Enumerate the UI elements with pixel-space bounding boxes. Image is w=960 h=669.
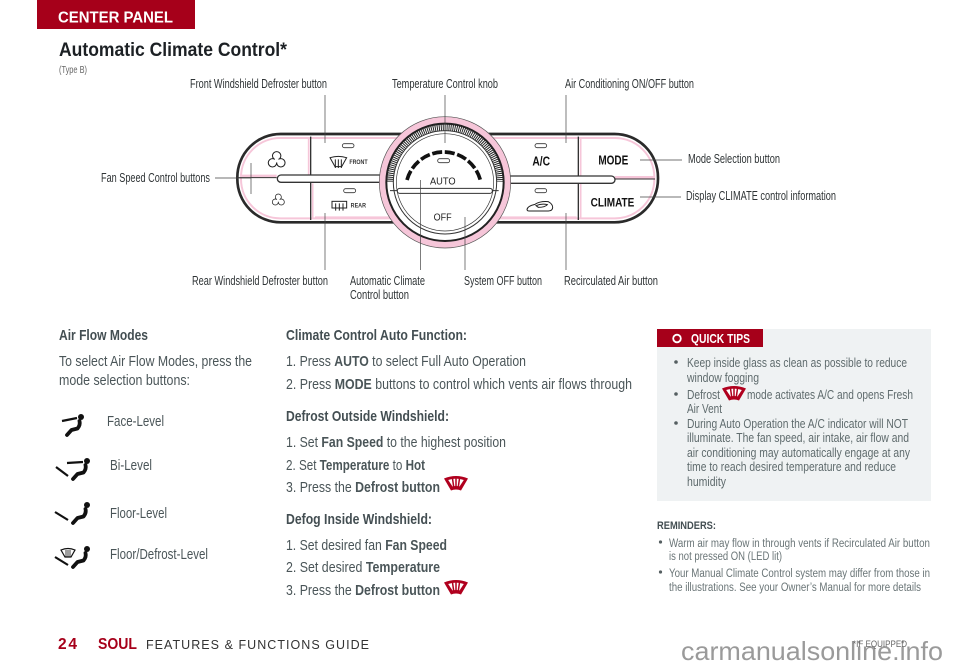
label: front windshield defroster bbox=[190, 77, 327, 143]
icon: fan speed low bbox=[272, 194, 284, 205]
label: air conditioning button bbox=[565, 77, 694, 143]
defog inside windshield: 3. Press the Defrost button bbox=[286, 582, 440, 599]
reminder: recirculated air bbox=[659, 538, 930, 563]
air flow modes section bbox=[55, 327, 252, 567]
header tab: center panel bbox=[37, 0, 195, 29]
defog inside windshield bbox=[286, 511, 468, 599]
tip: defrost mode bbox=[674, 386, 913, 416]
reminders heading: REMINDERS: bbox=[657, 520, 716, 532]
label: mode selection button: Mode Selection button bbox=[688, 152, 780, 166]
defog inside windshield: Defog Inside Windshield: bbox=[286, 511, 432, 528]
reminder: manual climate control: the illustrations. See your Owner’s Manual for more details bbox=[669, 582, 921, 594]
defrost outside windshield bbox=[286, 408, 506, 496]
footer bbox=[58, 636, 943, 666]
instruction text bbox=[59, 353, 252, 389]
button: mode: MODE bbox=[598, 152, 629, 167]
label: recirculated air button bbox=[564, 213, 658, 288]
button: climate: CLIMATE bbox=[591, 196, 634, 210]
auto function: Climate Control Auto Function: bbox=[286, 327, 467, 344]
mode: bi-level: Bi-Level bbox=[110, 457, 152, 474]
button: rear defroster: REAR bbox=[351, 203, 366, 210]
instruction text: mode selection buttons: bbox=[59, 372, 190, 389]
tip: clean glass: window fogging bbox=[686, 371, 759, 385]
auto function bbox=[286, 327, 632, 393]
label: air conditioning button: Air Conditioning ON/OFF button bbox=[565, 77, 694, 91]
mode: floor-level: Floor-Level bbox=[110, 505, 167, 522]
page number: 24 bbox=[58, 636, 77, 653]
tip: auto operation: illuminate. The fan speed, air intake, air flow and bbox=[687, 431, 909, 445]
label: rear windshield defroster bbox=[192, 213, 328, 288]
quick tips tab: QUICK TIPS bbox=[691, 331, 750, 346]
label: fan speed control buttons bbox=[101, 163, 251, 194]
tip: clean glass bbox=[674, 356, 907, 385]
label: front windshield defroster: Front Windshield Defroster button bbox=[190, 77, 327, 91]
auto function: 2. Press MODE buttons to control which vents air flows through bbox=[286, 376, 632, 393]
indicator lights bbox=[342, 144, 547, 193]
defog inside windshield: 1. Set desired fan Fan Speed bbox=[286, 537, 447, 554]
tip: auto operation: time to reach desired temperature and reduce bbox=[687, 460, 896, 474]
mode: face-level bbox=[62, 413, 164, 435]
button: A/C: A/C bbox=[532, 155, 550, 169]
temperature knob: AUTO bbox=[430, 177, 456, 188]
mode: floor-level bbox=[55, 502, 167, 523]
heading: air flow modes: Air Flow Modes bbox=[59, 327, 148, 344]
if equipped note: *IF EQUIPPED bbox=[853, 639, 907, 650]
temperature knob: OFF bbox=[434, 212, 452, 223]
temperature knob bbox=[379, 117, 511, 248]
tip: clean glass: Keep inside glass as clean as possible to reduce bbox=[687, 356, 907, 370]
button: front defroster bbox=[330, 156, 368, 168]
climate control instructions bbox=[286, 327, 632, 599]
button: front defroster: FRONT bbox=[349, 159, 368, 166]
mode: floor/defrost-level bbox=[55, 546, 208, 567]
panel: quick tips bbox=[657, 329, 931, 501]
label: recirculated air button: Recirculated Air button bbox=[564, 274, 658, 288]
climate control panel diagram bbox=[237, 117, 658, 248]
tip: auto operation: air conditioning may automatically engage at any bbox=[687, 446, 911, 460]
watermark: carmanualsonline.info bbox=[681, 636, 943, 666]
label: rear windshield defroster: Rear Windshield Defroster button bbox=[192, 274, 328, 288]
tip: auto operation: During Auto Operation the A/C indicator will NOT bbox=[687, 417, 908, 431]
tip: defrost mode: mode activates A/C and opens Fresh bbox=[747, 388, 913, 402]
label: temperature control knob bbox=[392, 77, 498, 143]
icon: recirculated air car bbox=[527, 202, 553, 211]
label: system off button: System OFF button bbox=[464, 274, 542, 288]
label: automatic climate control button: Automatic Climate bbox=[350, 274, 425, 288]
header tab: center panel: CENTER PANEL bbox=[58, 10, 173, 26]
model name: SOUL bbox=[98, 636, 137, 653]
label: system off button bbox=[464, 217, 542, 288]
label: fan speed control buttons: Fan Speed Control buttons bbox=[101, 171, 210, 185]
reminder: manual climate control bbox=[659, 568, 930, 594]
title: Automatic Climate Control* bbox=[59, 40, 288, 61]
panel body bbox=[237, 134, 658, 222]
guide title: FEATURES & FUNCTIONS GUIDE bbox=[146, 638, 369, 652]
reminder: recirculated air: is not pressed ON (LED lit) bbox=[669, 551, 782, 563]
auto function: 1. Press AUTO to select Full Auto Operation bbox=[286, 353, 526, 370]
reminders bbox=[657, 520, 930, 594]
button: rear defroster bbox=[332, 201, 366, 211]
subtitle: type B: (Type B) bbox=[59, 65, 87, 76]
mode: face-level: Face-Level bbox=[107, 413, 164, 430]
label: automatic climate control button: Control button bbox=[350, 288, 409, 302]
mode: floor/defrost-level: Floor/Defrost-Level bbox=[110, 546, 208, 563]
mode: bi-level bbox=[56, 457, 152, 479]
defrost outside windshield: 2. Set Temperature to Hot bbox=[286, 457, 425, 474]
instruction text: To select Air Flow Modes, press the bbox=[59, 353, 252, 370]
tip: defrost mode: Air Vent bbox=[687, 402, 722, 416]
label: display climate information: Display CLIMATE control information bbox=[686, 189, 836, 203]
defrost outside windshield: Defrost Outside Windshield: bbox=[286, 408, 449, 425]
tip: defrost mode: Defrost bbox=[687, 388, 720, 402]
label: temperature control knob: Temperature Control knob bbox=[392, 77, 498, 91]
defrost outside windshield: 3. Press the Defrost button bbox=[286, 479, 440, 496]
label: automatic climate control button bbox=[350, 180, 425, 302]
leader lines and labels bbox=[101, 77, 836, 302]
tip: auto operation: humidity bbox=[687, 475, 727, 489]
defrost outside windshield: 1. Set Fan Speed to the highest position bbox=[286, 434, 506, 451]
quick tips tab bbox=[657, 329, 763, 347]
tip: auto operation bbox=[674, 417, 911, 489]
defog inside windshield: 2. Set desired Temperature bbox=[286, 559, 440, 576]
icon: fan speed high bbox=[268, 152, 285, 167]
